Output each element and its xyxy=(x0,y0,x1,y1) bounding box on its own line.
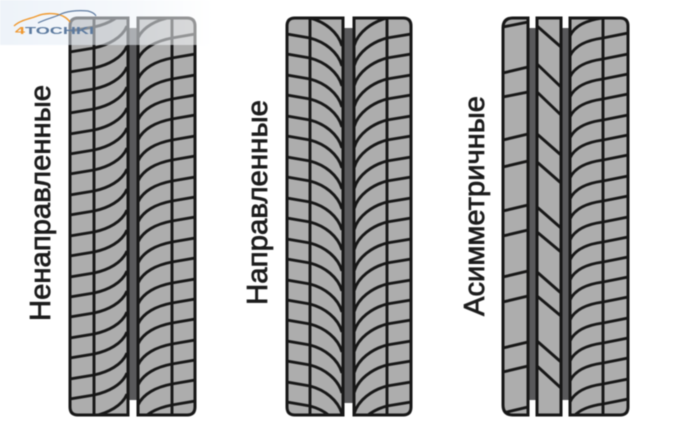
tire: asymmetric tread xyxy=(503,13,628,422)
logo banner xyxy=(0,0,215,45)
left shoulder block xyxy=(503,18,528,415)
right tread block xyxy=(570,18,628,415)
right sipes xyxy=(570,13,628,422)
left sipes xyxy=(287,14,342,426)
center groove xyxy=(127,28,139,400)
tire: non-directional tread xyxy=(70,0,195,426)
grooves xyxy=(527,28,571,400)
logo: 4tochki xyxy=(14,11,96,37)
chevrons on middle rib xyxy=(537,26,561,388)
left tread block xyxy=(287,18,343,415)
label: asymmetric: Асимметричные xyxy=(459,96,491,316)
label: non-directional: Ненаправленные xyxy=(25,85,57,321)
left tread block xyxy=(70,18,128,415)
right sipes xyxy=(354,14,411,426)
shoulder sipes xyxy=(503,22,528,413)
right sipes xyxy=(138,0,195,426)
right tread block xyxy=(138,18,195,415)
left sipes xyxy=(70,5,127,420)
car outline: orange swoosh xyxy=(14,14,70,26)
label: directional: Направленные xyxy=(242,100,274,305)
logo text: 4 TOCHKI xyxy=(15,25,94,37)
center groove xyxy=(342,28,355,403)
tire: directional tread xyxy=(287,14,411,426)
right tread block xyxy=(354,18,411,415)
car outline: blue swoosh xyxy=(38,11,96,23)
middle rib xyxy=(537,18,561,415)
